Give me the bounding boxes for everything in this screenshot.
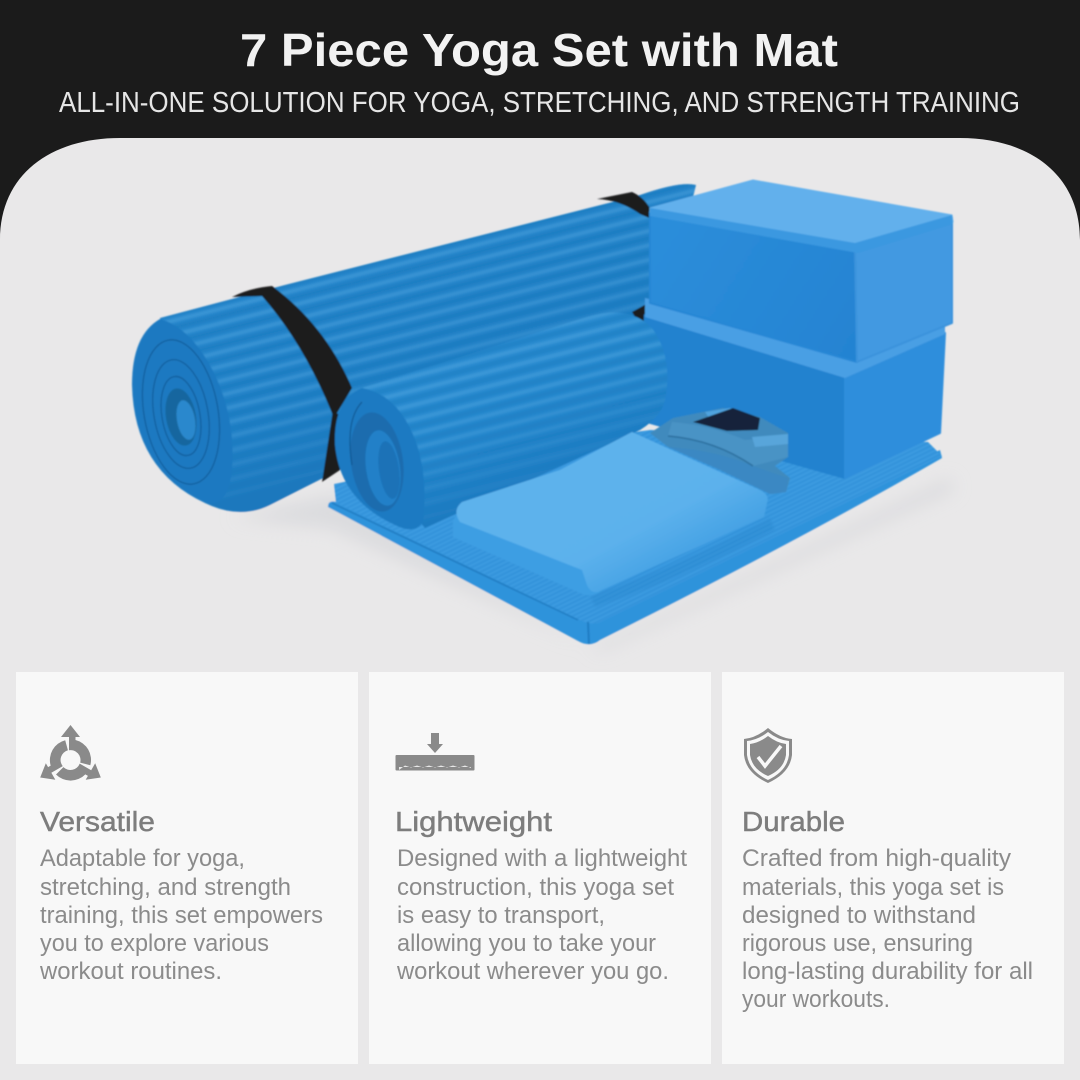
small mat end face [335, 388, 425, 529]
folded small towel [453, 432, 775, 607]
panel: lightweight [369, 672, 711, 1064]
text block: lightweight: allowing you to take your [397, 930, 656, 957]
text block: versatile: workout routines. [39, 958, 222, 985]
text block: durable: materials, this yoga set is [742, 874, 1004, 901]
text block: versatile: stretching, and strength [40, 874, 291, 901]
large towel [328, 430, 942, 644]
panel: durable [722, 672, 1064, 1064]
text block: lightweight: construction, this yoga set [397, 874, 674, 901]
header band [0, 0, 1080, 240]
strap buckle [693, 408, 760, 431]
text block: lightweight: Designed with a lightweight [397, 845, 687, 872]
icon: shield with check [744, 728, 792, 783]
small rolled mat [334, 312, 667, 530]
heading: versatile: Versatile [40, 806, 155, 837]
text block: lightweight [396, 845, 687, 985]
icon: weight on thin layer [396, 733, 474, 770]
text block: durable: designed to withstand [742, 902, 976, 929]
text block: versatile: you to explore various [40, 930, 269, 957]
heading: lightweight: Lightweight [395, 806, 552, 837]
lower block [640, 298, 945, 478]
heading: durable: Durable [742, 806, 845, 837]
text block: versatile [39, 845, 323, 985]
text block: durable: rigorous use, ensuring [742, 930, 973, 957]
text block: durable: Crafted from high-quality [742, 845, 1011, 872]
floor shadow [230, 478, 955, 652]
text block: durable: long-lasting durability for all [742, 958, 1033, 985]
mat end face [132, 319, 233, 504]
upper block [650, 180, 953, 362]
mat strap [232, 192, 654, 482]
stacked yoga blocks [640, 180, 953, 478]
text block: versatile: training, this set empowers [40, 902, 323, 929]
product photo: yoga set [130, 170, 955, 652]
large rolled mat [130, 170, 720, 520]
text block: durable: your workouts. [742, 986, 890, 1013]
text block: versatile: Adaptable for yoga, [40, 845, 245, 872]
text block: lightweight: workout wherever you go. [396, 958, 669, 985]
title: 7 Piece Yoga Set with Mat [240, 24, 838, 76]
panel: versatile [16, 672, 358, 1064]
text block: lightweight: is easy to transport, [397, 902, 605, 929]
icon: three-way arrows [30, 725, 106, 795]
text block: durable [742, 845, 1033, 1013]
folded stretching strap [650, 408, 790, 494]
